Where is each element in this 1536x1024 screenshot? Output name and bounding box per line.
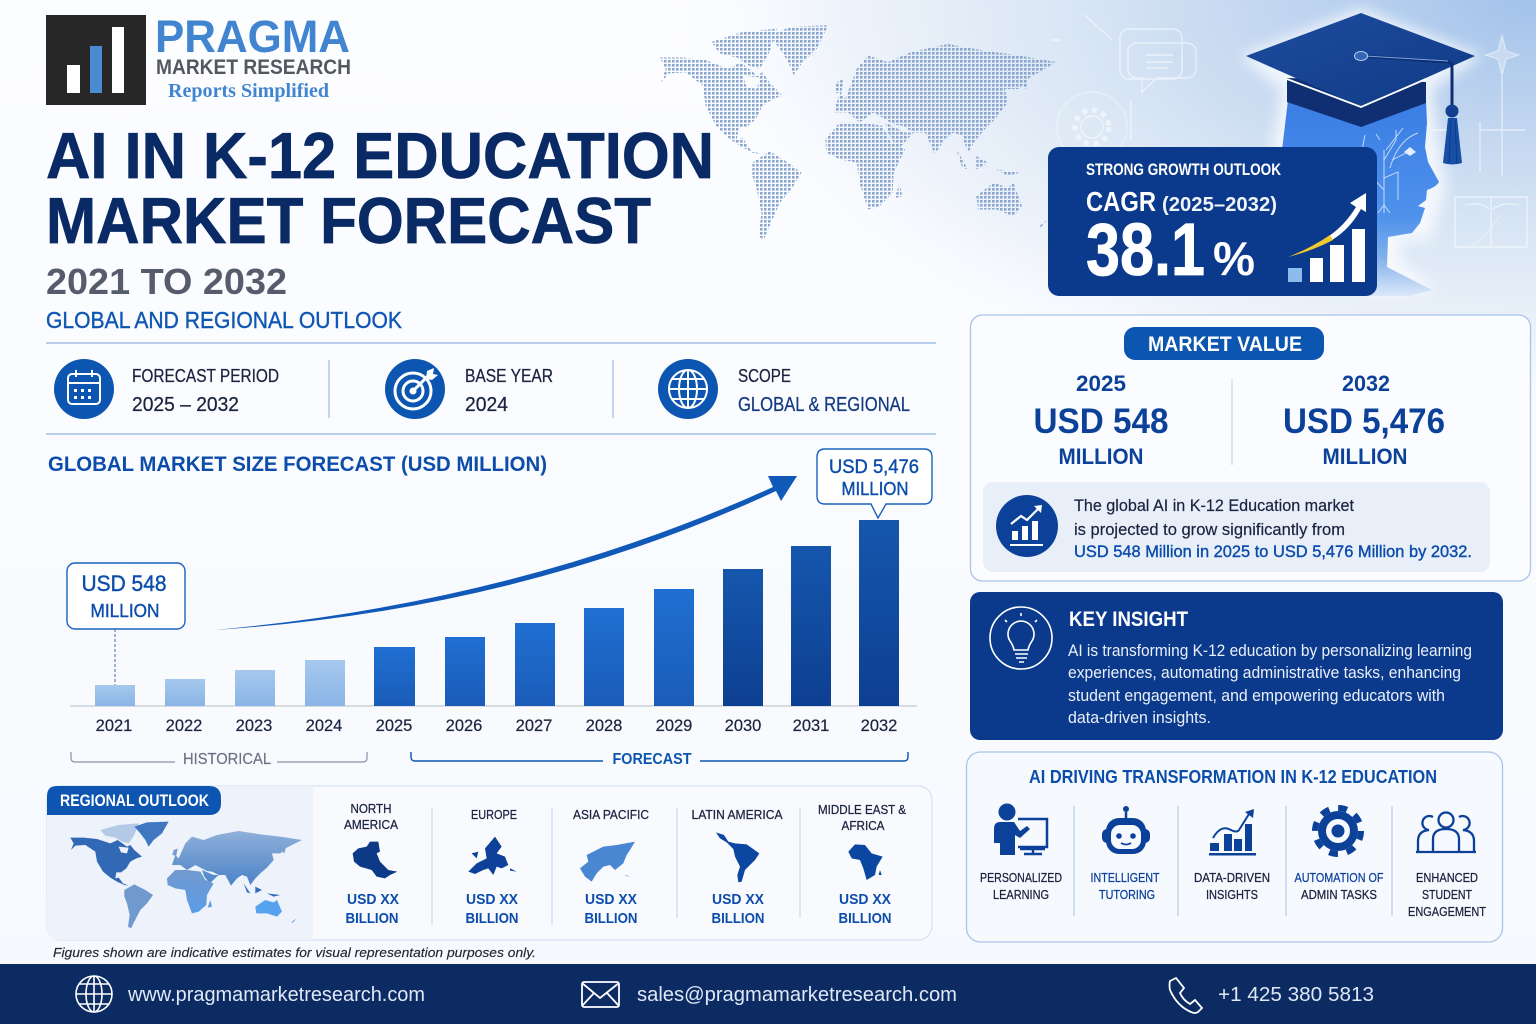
year axis labels: 2030	[725, 717, 761, 735]
bar chart	[67, 449, 932, 768]
scope item: GLOBAL & REGIONAL	[738, 394, 910, 416]
item: personalized learning: PERSONALIZED	[980, 871, 1062, 885]
scope item	[658, 359, 910, 419]
panel: CAGR: CAGR	[1086, 186, 1156, 217]
region: europe: USD XX	[466, 891, 518, 908]
region: europe: EUROPE	[471, 808, 517, 822]
email: sales@pragmamarketresearch.com	[637, 984, 957, 1006]
year axis labels: 2024	[306, 717, 342, 735]
panel: key insight: student engagement, and empowering educators with	[1068, 687, 1445, 705]
info row	[46, 343, 936, 434]
forecast period item: 2025 – 2032	[132, 394, 239, 416]
historical bracket: HISTORICAL	[183, 751, 271, 768]
callout USD 5,476	[817, 449, 932, 518]
forecast bracket: FORECAST	[612, 751, 692, 768]
market value pill	[1124, 327, 1324, 360]
icon: globe	[76, 976, 112, 1012]
panel: CAGR	[1048, 147, 1377, 296]
year axis labels: 2032	[861, 717, 897, 735]
region: europe: BILLION	[466, 910, 518, 927]
cap underside	[1287, 78, 1426, 127]
item: data-driven insights	[1194, 809, 1270, 902]
tassel	[1354, 52, 1462, 164]
callout USD 548: MILLION	[90, 600, 160, 621]
icon: envelope	[582, 982, 619, 1007]
year axis labels	[96, 717, 897, 735]
item: data-driven insights: INSIGHTS	[1206, 888, 1258, 902]
logo: Reports Simplified	[168, 80, 329, 102]
forecast bracket	[411, 751, 908, 768]
scope item: SCOPE	[738, 366, 791, 386]
region: middle east and africa	[818, 803, 907, 927]
value 2032: MILLION	[1322, 444, 1408, 469]
item: data-driven insights: DATA-DRIVEN	[1194, 871, 1270, 885]
item: enhanced student engagement: STUDENT	[1422, 888, 1472, 902]
footer	[0, 964, 1536, 1024]
region: latin america	[692, 808, 783, 927]
cap top	[1246, 13, 1475, 107]
region: north america: NORTH	[350, 802, 392, 816]
base year item: 2024	[465, 394, 508, 416]
value 2025: MILLION	[1058, 444, 1144, 469]
market summary box: The global AI in K-12 Education market	[1074, 497, 1354, 515]
year axis labels: 2021	[96, 717, 132, 735]
year axis labels: 2031	[793, 717, 829, 735]
value 2025: USD 548	[1034, 402, 1168, 441]
region: middle east and africa: BILLION	[838, 910, 892, 927]
regional tab: REGIONAL OUTLOOK	[60, 792, 209, 810]
region: asia pacific: USD XX	[585, 891, 637, 908]
year axis labels: 2026	[446, 717, 482, 735]
base year item: BASE YEAR	[465, 366, 553, 386]
region: north america	[344, 802, 399, 927]
item: personalized learning: LEARNING	[993, 888, 1049, 902]
year axis labels: 2023	[236, 717, 272, 735]
item: automation of admin tasks: AUTOMATION OF	[1294, 871, 1384, 885]
region: latin america: BILLION	[712, 910, 764, 927]
year axis labels: 2029	[656, 717, 692, 735]
head silhouette	[1282, 100, 1439, 296]
item: intelligent tutoring: TUTORING	[1099, 888, 1155, 902]
region: north america: USD XX	[347, 891, 399, 908]
panel: regional outlook	[47, 786, 932, 940]
region: north america: AMERICA	[344, 818, 399, 832]
title: AI IN K-12 EDUCATION	[46, 119, 714, 192]
item: personalized learning	[980, 804, 1062, 902]
region: latin america: LATIN AMERICA	[692, 808, 783, 822]
region: north america: BILLION	[346, 910, 398, 927]
region: asia pacific: ASIA PACIFIC	[573, 808, 649, 822]
icon: phone	[1170, 978, 1202, 1013]
subtitle years: 2021 TO 2032	[46, 261, 287, 302]
value 2032	[1283, 371, 1445, 469]
value 2032: 2032	[1342, 371, 1390, 396]
forecast period item: FORECAST PERIOD	[132, 366, 279, 386]
item: intelligent tutoring: INTELLIGENT	[1090, 871, 1160, 885]
panel: key insight: data-driven insights.	[1068, 709, 1211, 727]
market value pill: MARKET VALUE	[1148, 332, 1302, 356]
panel: CAGR: %	[1213, 232, 1255, 285]
region: asia pacific: BILLION	[584, 910, 638, 927]
panel: AI driving transformation	[966, 752, 1502, 942]
base year item	[385, 359, 553, 419]
callout USD 5,476: USD 5,476	[829, 457, 919, 478]
dotted world map background	[660, 25, 1055, 239]
icon: light bulb	[990, 607, 1052, 669]
region: asia pacific	[573, 808, 649, 927]
year axis labels: 2028	[586, 717, 622, 735]
historical bracket	[71, 751, 367, 768]
callout USD 5,476: MILLION	[842, 479, 908, 499]
growth arrow	[215, 476, 797, 630]
panel: key insight	[970, 592, 1503, 740]
region: latin america: USD XX	[712, 891, 764, 908]
regional world map	[70, 822, 302, 928]
panel: key insight: experiences, automating administrative tasks, enhancing	[1068, 664, 1461, 682]
callout USD 548	[67, 563, 185, 685]
panel: CAGR: (2025–2032)	[1162, 194, 1277, 216]
panel: CAGR: 38.1	[1086, 208, 1205, 291]
subtitle scope: GLOBAL AND REGIONAL OUTLOOK	[46, 307, 403, 333]
callout USD 548: USD 548	[82, 571, 166, 596]
panel: CAGR: STRONG GROWTH OUTLOOK	[1086, 160, 1282, 179]
logo: MARKET RESEARCH	[156, 56, 351, 79]
decorative education icons	[1052, 15, 1527, 247]
panel: AI driving transformation: AI DRIVING TRANSFORMATION IN K-12 EDUCATION	[1029, 767, 1437, 787]
growth icon	[1288, 193, 1366, 282]
title: MARKET FORECAST	[46, 184, 651, 257]
forecast period item	[54, 359, 279, 419]
region: middle east and africa: AFRICA	[842, 819, 885, 833]
year axis labels: 2025	[376, 717, 412, 735]
value 2025: 2025	[1076, 371, 1126, 396]
item: intelligent tutoring	[1090, 806, 1160, 902]
market summary box: is projected to grow significantly from	[1074, 521, 1345, 539]
item: enhanced student engagement: ENHANCED	[1416, 871, 1478, 885]
logo: PRAGMA	[155, 11, 350, 62]
market summary box: USD 548 Million in 2025 to USD 5,476 Million by 2032.	[1074, 543, 1472, 561]
phone number: +1 425 380 5813	[1218, 984, 1374, 1006]
title	[46, 119, 714, 257]
panel: market value	[970, 315, 1530, 581]
panel: key insight: KEY INSIGHT	[1069, 608, 1188, 631]
logo	[46, 11, 351, 105]
item: enhanced student engagement: ENGAGEMENT	[1408, 905, 1486, 919]
year axis labels: 2022	[166, 717, 202, 735]
panel: key insight: AI is transforming K-12 education by personalizing learning	[1068, 642, 1472, 660]
website: www.pragmamarketresearch.com	[127, 984, 425, 1006]
item: automation of admin tasks	[1294, 808, 1384, 902]
region: middle east and africa: USD XX	[839, 891, 891, 908]
regional tab	[47, 786, 221, 815]
circuit lines	[1362, 128, 1418, 213]
region: europe	[466, 808, 518, 927]
item: automation of admin tasks: ADMIN TASKS	[1301, 888, 1377, 902]
year axis labels: 2027	[516, 717, 552, 735]
item: enhanced student engagement	[1408, 812, 1486, 919]
chart heading: GLOBAL MARKET SIZE FORECAST (USD MILLION)	[48, 453, 547, 476]
region: middle east and africa: MIDDLE EAST &	[818, 803, 907, 817]
value 2032: USD 5,476	[1283, 402, 1445, 441]
disclaimer note: Figures shown are indicative estimates for visual representation purposes only.	[53, 945, 536, 960]
value 2025	[1034, 371, 1168, 469]
graduate head illustration	[1240, 8, 1482, 296]
market summary box	[983, 482, 1490, 572]
